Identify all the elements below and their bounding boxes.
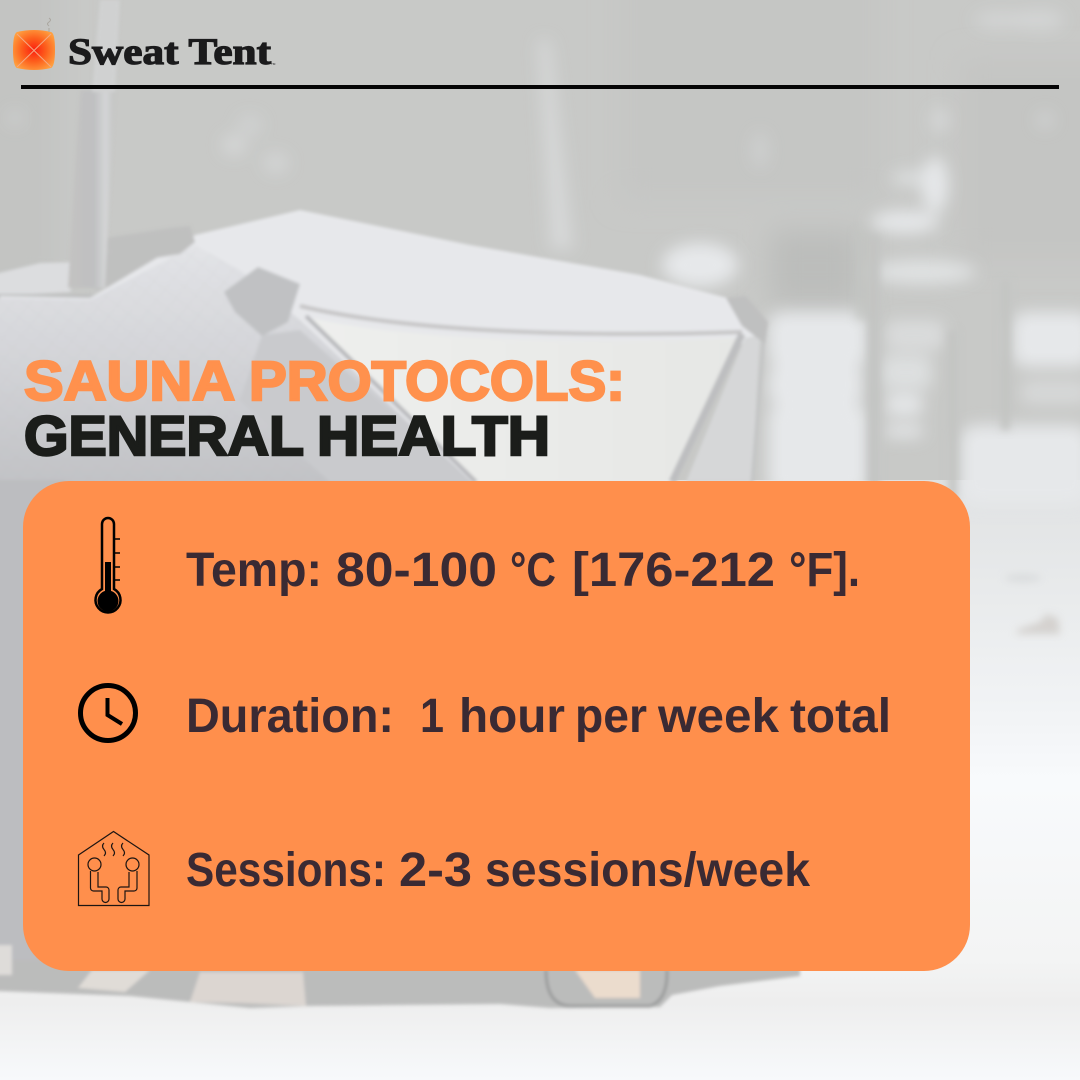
text: duration: 1 [420, 690, 444, 743]
text: temperature: °F]. [789, 544, 860, 597]
text: temperature: 80-100 [336, 544, 497, 597]
tent shapes [0, 0, 768, 975]
ground detail [1005, 574, 1060, 634]
logo: Sweat Tent: TM [271, 62, 276, 66]
heading line 2: HEALTH [317, 404, 550, 467]
text: duration: total [790, 690, 891, 743]
text: duration: Duration: [186, 690, 394, 743]
text: sessions: Sessions: [186, 844, 386, 897]
tree trunks [855, 230, 1010, 500]
header rule [21, 85, 1059, 89]
heading line 2: GENERAL [24, 404, 303, 467]
text: temperature: °C [510, 544, 556, 597]
text: temperature: Temp: [186, 544, 322, 597]
text: sessions: 2-3 [399, 844, 472, 897]
icon: orange tent square [13, 18, 55, 70]
snowy tree blobs [7, 10, 1080, 505]
text: duration: week [657, 690, 779, 743]
heading line 1: SAUNA [24, 349, 234, 412]
icon: clock [80, 686, 136, 740]
text: duration: hour [459, 690, 565, 743]
text: sessions: sessions/week [485, 844, 810, 897]
tent base and wood [0, 945, 800, 1008]
icon: sauna house [78, 832, 149, 906]
title [24, 349, 625, 467]
text: temperature: [176-212 [572, 544, 775, 597]
logo: Sweat Tent [13, 18, 276, 73]
forest tones [0, 0, 1080, 305]
panel: protocol details [23, 481, 970, 971]
snow ground [0, 480, 1080, 1080]
wordmark: Sweat Tent [68, 32, 272, 73]
text: duration: per [575, 690, 647, 743]
icon: thermometer [95, 518, 120, 612]
heading line 1: PROTOCOLS: [249, 349, 625, 412]
